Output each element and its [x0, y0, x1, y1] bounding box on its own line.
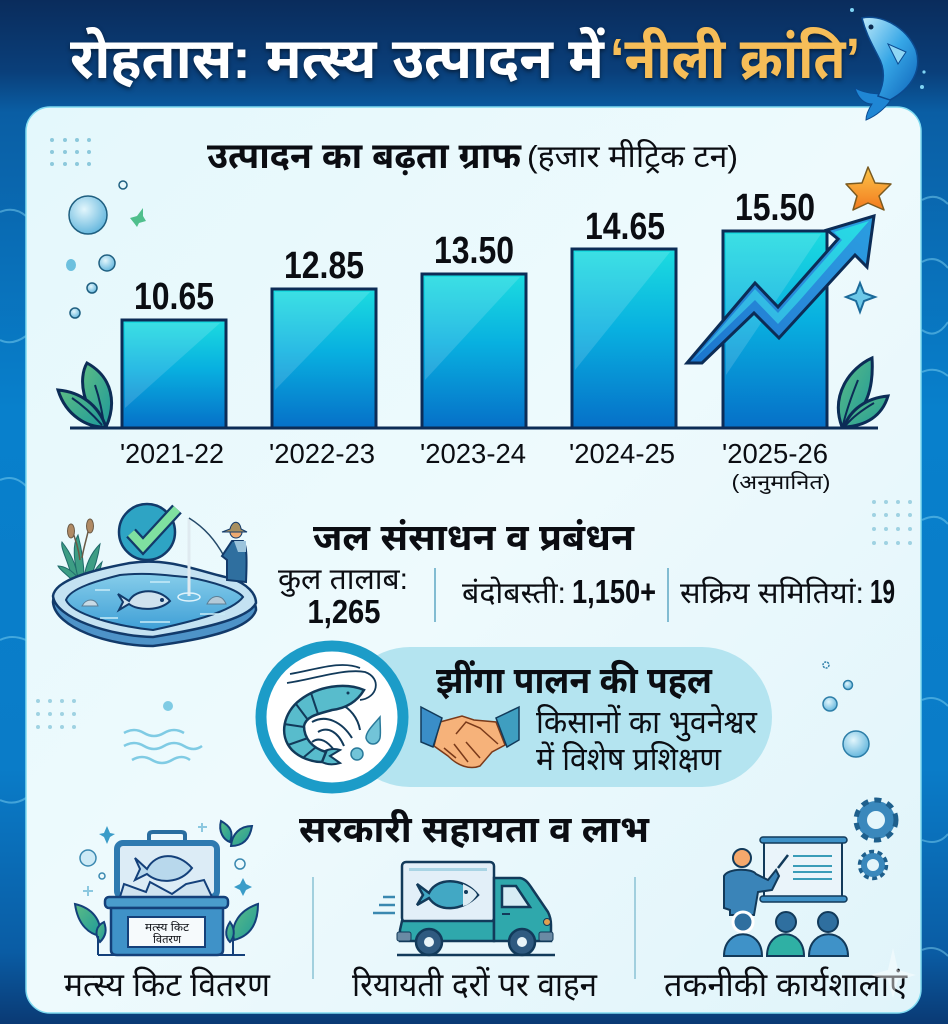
sparkles and bubbles [99, 826, 115, 844]
icon: fish kit [75, 821, 258, 955]
bar: 2025-26 [722, 187, 830, 495]
fish [118, 591, 170, 610]
tail [316, 749, 340, 764]
rod [188, 518, 190, 596]
leaves [75, 821, 258, 942]
speed lines [373, 897, 395, 913]
wheels [416, 929, 442, 955]
stat: active committees: सक्रिय समितियां: [680, 576, 864, 610]
pond ripples [95, 582, 225, 622]
chart heading: उत्पादन का बढ़ता ग्राफ [207, 135, 522, 176]
icon: star [846, 167, 891, 210]
lid fish [135, 856, 192, 881]
stat: settlements: बंदोबस्ती: [462, 576, 566, 610]
lid [117, 843, 217, 897]
dot grid right [872, 500, 912, 545]
bar: 2025-26: (अनुमानित) [732, 470, 830, 495]
stat: total ponds [278, 563, 408, 630]
bar: 2023-24: '2023-24 [420, 438, 526, 469]
bar: 2022-23 [269, 245, 376, 469]
truck caption: रियायती दरों पर वाहन [352, 966, 598, 1003]
kit label: मत्स्य किट [145, 921, 189, 934]
bar: 2021-22 [120, 276, 226, 469]
box [111, 908, 223, 955]
fish pile [120, 880, 212, 897]
initiative text: किसानों का भुवनेश्वर [536, 704, 758, 742]
droplets [366, 717, 380, 744]
kit label: वितरण [153, 933, 182, 946]
antennae [287, 665, 376, 700]
bar: 2024-25: '2024-25 [569, 438, 675, 469]
icon: pond with fisherman [53, 504, 256, 646]
reeds [58, 535, 102, 582]
icon: leaping fish [850, 8, 926, 120]
handle [149, 832, 185, 843]
bar: 2021-22: 10.65 [134, 276, 214, 318]
chart heading [207, 135, 738, 176]
water management heading: जल संसाधन व प्रबंधन [313, 517, 635, 558]
bar: 2024-25: 14.65 [585, 206, 665, 248]
shrimp badge [261, 646, 403, 788]
truck fish [417, 881, 478, 908]
stat: total ponds: 1,265 [308, 593, 380, 630]
growth arrow [687, 216, 874, 363]
bar: 2022-23: 12.85 [284, 245, 364, 287]
legs [312, 704, 360, 750]
dot grid top left [50, 138, 91, 166]
pond [53, 569, 256, 646]
bar: 2023-24 [420, 230, 526, 469]
bar: 2022-23: '2022-23 [269, 438, 375, 469]
bubbles right [823, 662, 869, 757]
stat: active committees: 19 [870, 573, 895, 610]
presenter [733, 849, 751, 867]
board [764, 841, 842, 897]
title: रोहतास: मत्स्य उत्पादन में [70, 26, 605, 91]
initiative text [536, 704, 758, 777]
initiative heading: झींगा पालन की पहल [436, 659, 713, 701]
audience [724, 912, 848, 956]
workshop caption: तकनीकी कार्यशालाएं [664, 966, 908, 1003]
kit label [128, 917, 205, 947]
bar: 2023-24: 13.50 [434, 230, 514, 272]
title [70, 26, 860, 91]
check badge [119, 504, 175, 560]
box rim [105, 897, 228, 908]
initiative text: में विशेष प्रशिक्षण [536, 741, 722, 777]
kit caption: मत्स्य किट वितरण [64, 966, 271, 1003]
icon: delivery truck [373, 862, 555, 955]
fisherman [222, 541, 247, 582]
gears [862, 806, 890, 834]
stat: settlements [462, 573, 656, 610]
body [284, 686, 364, 762]
bar: 2025-26: 15.50 [735, 187, 815, 229]
rocks [82, 600, 98, 606]
stat: total ponds: कुल तालाब: [278, 563, 408, 597]
waves [124, 701, 202, 763]
government support heading: सरकारी सहायता व लाभ [299, 809, 650, 850]
icon: handshake [421, 707, 519, 768]
bar chart [70, 187, 878, 495]
bar: 2025-26: '2025-26 [722, 438, 828, 469]
bar: 2024-25 [569, 206, 676, 469]
icon: leaves left [58, 363, 112, 427]
stat: settlements: 1,150+ [572, 573, 656, 610]
faint sparkle watermark [870, 948, 916, 998]
dot grid mid left [36, 699, 76, 729]
title: ‘नीली क्रांति’ [610, 26, 860, 91]
chart heading: (हजार मीट्रिक टन) [527, 139, 738, 174]
icon: sparkle [846, 283, 875, 312]
bubbles left [66, 181, 146, 318]
shrimp initiative callout [261, 646, 772, 788]
icon: workshop [724, 800, 896, 956]
icon: leaves right [838, 358, 888, 427]
bar: 2021-22: '2021-22 [120, 438, 224, 469]
